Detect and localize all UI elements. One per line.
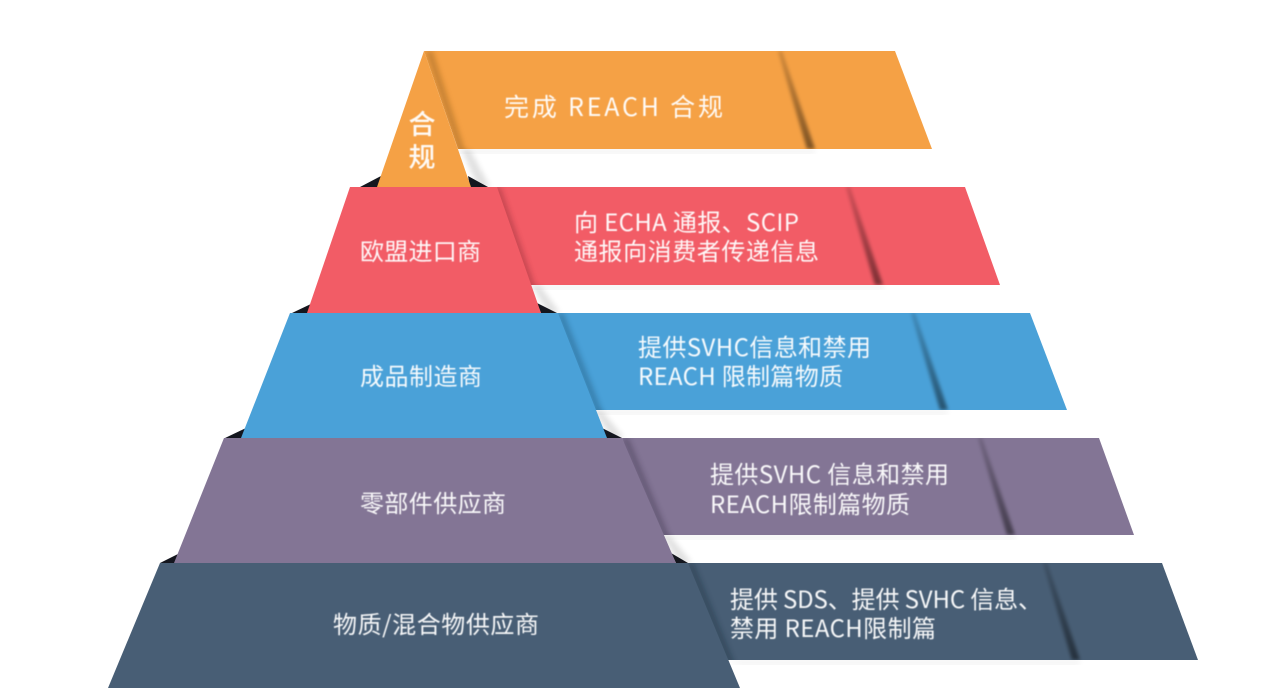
ribbon text: 提供SVHC信息和禁用 [638,328,871,363]
ribbon text: REACH限制篇物质 [710,485,910,520]
pyramid block: substance and mixture suppliers [108,563,740,688]
ribbon text: REACH 限制篇物质 [638,357,843,392]
ribbon text: 提供SVHC 信息和禁用 [710,455,949,490]
tier 4: parts suppliers [160,438,1134,563]
vertical label: compliance: 合 [408,103,436,142]
icon: dark corner left [360,176,381,187]
ribbon text: 提供 SDS、提供 SVHC 信息、 [730,580,1042,615]
ribbon text: 禁用 REACH限制篇 [730,609,936,644]
icon: dark corner left [160,553,180,563]
tier 2: EU importers [292,187,1000,313]
ribbon: provide SVHC information [622,438,1134,535]
vertical label: compliance [408,103,436,175]
pyramid block: EU importers [307,187,541,313]
icon: dark corner right [602,428,622,438]
tier label: 欧盟进口商 [360,232,481,267]
ribbon text: 通报向消费者传递信息 [574,232,819,267]
ribbon: provide SVHC information [558,313,1067,410]
tier label: 成品制造商 [360,357,482,392]
ribbon: notify ECHA [497,187,1000,285]
tier label: 物质/混合物供应商 [333,605,539,640]
icon: dark corner right [468,176,488,187]
icon: dark corner left [225,428,246,438]
ribbon text [730,580,1042,644]
ribbon text [638,328,871,392]
icon: dark corner left [292,303,313,313]
pyramid block: parts suppliers [174,438,676,563]
tier 5: substance and mixture suppliers [108,563,1198,688]
tier 1: compliance [360,51,932,187]
pyramid block: finished product manufacturers [241,313,607,438]
ribbon text: 向 ECHA 通报、SCIP [574,203,799,238]
pyramid block: compliance [377,51,471,187]
tier label: 零部件供应商 [360,484,506,519]
icon: dark corner right [671,553,688,563]
ribbon: complete REACH compliance [424,51,932,149]
ribbon: provide SDS and SVHC information [688,563,1198,660]
vertical label: compliance: 规 [408,136,436,175]
icon: dark corner right [537,303,557,313]
ribbon text [574,203,819,267]
tier 3: finished product manufacturers [225,313,1067,438]
ribbon text [710,455,949,520]
ribbon text: 完成 REACH 合规 [504,88,723,124]
